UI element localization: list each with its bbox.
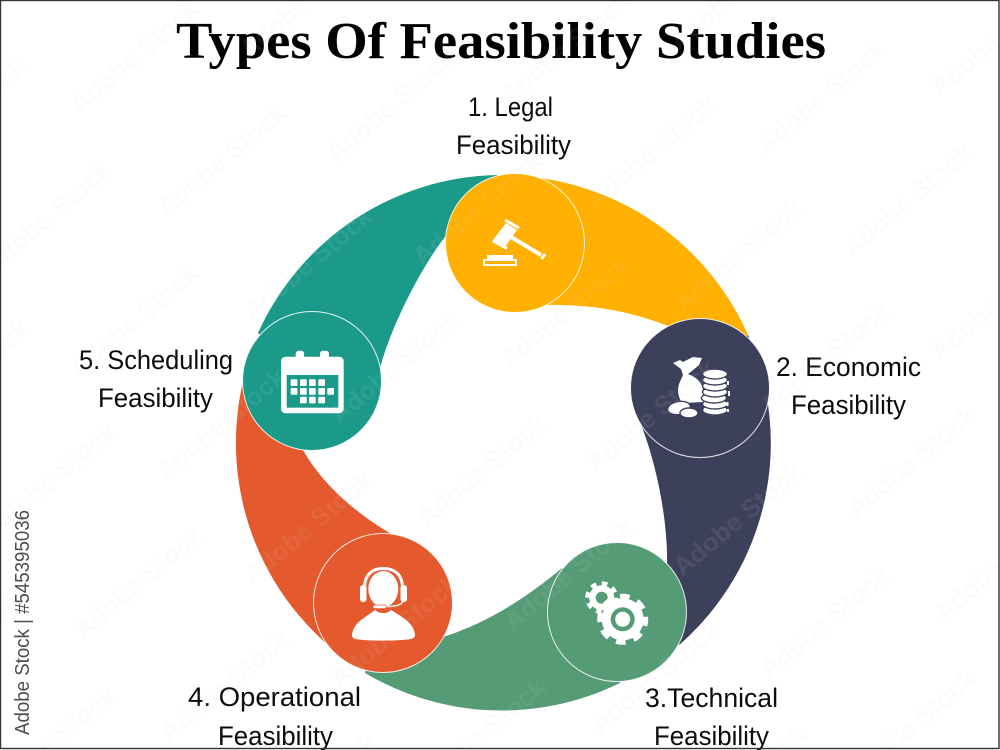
label: scheduling feasibility: 5. Scheduling (79, 345, 233, 375)
stock credit: Adobe Stock | #545395036 (12, 510, 34, 735)
icon: calendar (281, 351, 344, 413)
label: legal feasibility: 1. Legal (468, 92, 553, 122)
label: legal feasibility (456, 92, 571, 160)
label: technical feasibility: 3.Technical (645, 683, 778, 713)
ring band: technical to operational (365, 568, 620, 711)
label: operational feasibility (188, 682, 361, 750)
label: economic feasibility: 2. Economic (776, 352, 921, 382)
icon: headset operator (352, 568, 415, 641)
ring band: operational to scheduling (236, 341, 393, 645)
icon: gears (588, 584, 645, 642)
node: scheduling feasibility (242, 312, 382, 450)
label: economic feasibility (776, 352, 921, 420)
ring band: legal to economic (515, 178, 748, 388)
label: scheduling feasibility (79, 345, 233, 413)
node: technical feasibility (548, 542, 686, 682)
ring band: economic to technical (617, 335, 771, 645)
node: economic feasibility (630, 318, 770, 458)
label: legal feasibility: Feasibility (456, 130, 571, 160)
label: economic feasibility: Feasibility (791, 390, 906, 420)
node: operational feasibility (314, 534, 452, 672)
label: technical feasibility (645, 683, 778, 750)
label: scheduling feasibility: Feasibility (98, 383, 213, 413)
node: legal feasibility (446, 174, 584, 312)
label: operational feasibility: 4. Operational (188, 682, 361, 712)
icon: money bag and coins (667, 357, 730, 418)
title: Types Of Feasibility Studies (176, 13, 826, 70)
icon: gavel (484, 220, 545, 265)
ring band: scheduling to legal (258, 175, 515, 381)
